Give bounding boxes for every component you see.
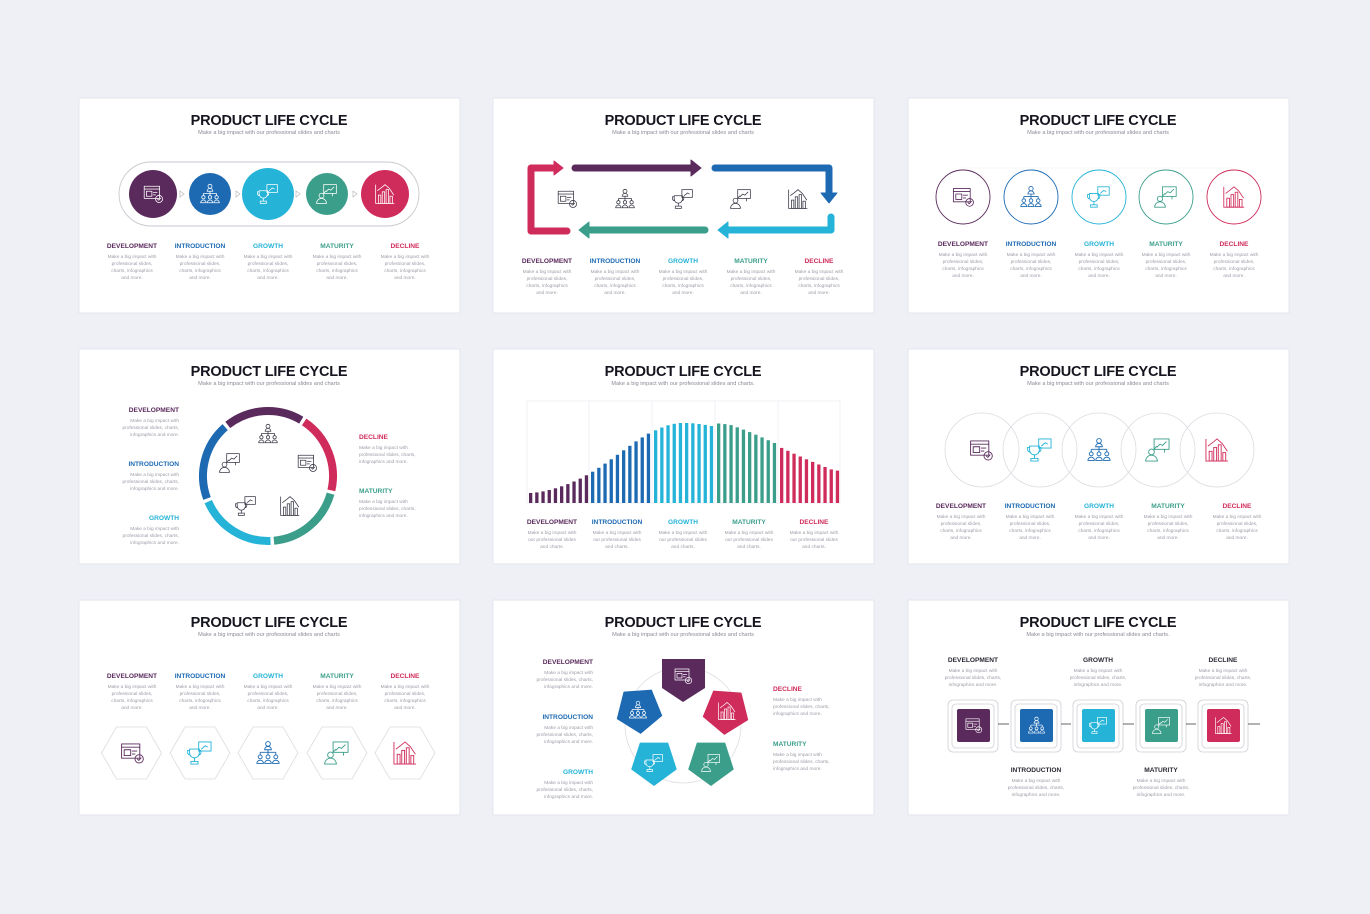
labels: Make a big impact with — [939, 252, 988, 258]
labels: and more. — [394, 705, 416, 711]
labels: and more. — [740, 290, 762, 296]
top labels: Make a big impact with — [1199, 668, 1248, 674]
labels: Make a big impact with — [313, 684, 362, 690]
labels: charts, infographics — [316, 698, 358, 704]
labels: and charts. — [802, 544, 826, 550]
labels: and more. — [189, 275, 211, 281]
labels: DEVELOPMENT — [936, 503, 986, 510]
labels: charts, infographics — [1145, 266, 1187, 272]
labels: professional slides, — [663, 276, 703, 282]
labels: charts, infographics — [526, 283, 568, 289]
labels: Make a big impact with — [937, 514, 986, 520]
left labels: professional slides, charts, — [122, 425, 179, 431]
left labels: Make a big impact with — [130, 472, 179, 478]
labels: professional slides, — [317, 261, 357, 267]
labels: professional slides, — [112, 691, 152, 697]
labels: MATURITY — [320, 243, 354, 250]
left labels: GROWTH — [563, 769, 593, 776]
labels: charts, infographics — [111, 698, 153, 704]
left labels: DEVELOPMENT — [129, 407, 179, 414]
labels: GROWTH — [253, 243, 283, 250]
labels: and charts. — [605, 544, 629, 550]
pentagons — [615, 659, 750, 791]
labels: and more. — [326, 705, 348, 711]
slide 1: circles in pill — [79, 98, 460, 313]
labels — [522, 258, 844, 296]
labels: DEVELOPMENT — [938, 241, 988, 248]
title: PRODUCT LIFE CYCLE — [605, 113, 762, 129]
left labels — [536, 659, 593, 800]
subtitle: Make a big impact with our professional slides and charts — [1027, 381, 1169, 387]
labels: INTRODUCTION — [590, 258, 641, 265]
left labels: Make a big impact with — [544, 670, 593, 676]
title: PRODUCT LIFE CYCLE — [1020, 615, 1177, 631]
left labels: infographics and more. — [130, 540, 179, 546]
labels: DECLINE — [800, 519, 829, 526]
labels: our professional slides — [593, 537, 641, 543]
left labels: DEVELOPMENT — [543, 659, 593, 666]
labels: DEVELOPMENT — [107, 673, 157, 680]
labels: Make a big impact with — [523, 269, 572, 275]
pill outline — [119, 162, 419, 226]
right labels — [773, 686, 830, 772]
bottom labels: professional slides, charts, — [1133, 785, 1189, 791]
bottom labels: infographics and more. — [1137, 792, 1185, 798]
labels: Make a big impact with — [176, 254, 225, 260]
labels: MATURITY — [734, 258, 768, 265]
labels: charts, infographics — [111, 268, 153, 274]
labels: professional slides, — [1217, 521, 1257, 527]
labels: Make a big impact with — [1144, 514, 1193, 520]
labels: and more. — [1223, 273, 1245, 279]
labels: professional slides, — [1214, 259, 1254, 265]
left labels: professional slides, charts, — [122, 533, 179, 539]
labels: professional slides, — [527, 276, 567, 282]
labels: GROWTH — [253, 673, 283, 680]
right labels: DECLINE — [359, 434, 389, 441]
right labels: infographics and more. — [359, 513, 408, 519]
labels: and more. — [257, 275, 279, 281]
left labels: Make a big impact with — [544, 780, 593, 786]
subtitle: Make a big impact with our professional slides and charts — [198, 130, 340, 136]
labels: charts, infographics — [1078, 528, 1120, 534]
labels: MATURITY — [1151, 503, 1185, 510]
right labels: Make a big impact with — [773, 697, 822, 703]
left labels: Make a big impact with — [544, 725, 593, 731]
labels: DECLINE — [805, 258, 834, 265]
labels: and charts. — [671, 544, 695, 550]
left labels — [122, 407, 179, 546]
labels: our professional slides — [528, 537, 576, 543]
labels: Make a big impact with — [727, 269, 776, 275]
subtitle: Make a big impact with our professional slides and charts — [612, 632, 754, 638]
left labels: GROWTH — [149, 515, 179, 522]
labels: and more. — [1088, 273, 1110, 279]
right labels: MATURITY — [773, 741, 807, 748]
slide 3: outline circles — [908, 98, 1289, 313]
labels: Make a big impact with — [659, 269, 708, 275]
labels: INTRODUCTION — [592, 519, 643, 526]
right labels: Make a big impact with — [773, 752, 822, 758]
title: PRODUCT LIFE CYCLE — [1020, 113, 1177, 129]
labels: professional slides, — [248, 261, 288, 267]
labels: Make a big impact with — [593, 530, 642, 536]
right labels — [359, 434, 416, 519]
hexagons — [102, 727, 435, 779]
top labels: DECLINE — [1209, 657, 1238, 664]
labels: charts, infographics — [247, 268, 289, 274]
left labels: infographics and more. — [544, 684, 593, 690]
labels: DECLINE — [1220, 241, 1249, 248]
title: PRODUCT LIFE CYCLE — [1020, 364, 1177, 380]
labels: Make a big impact with — [1006, 514, 1055, 520]
subtitle: Make a big impact with our professional slides and charts. — [611, 381, 755, 387]
labels: our professional slides — [790, 537, 838, 543]
top labels: Make a big impact with — [949, 668, 998, 674]
labels: Make a big impact with — [313, 254, 362, 260]
labels: and more. — [808, 290, 830, 296]
labels: DECLINE — [391, 673, 420, 680]
title: PRODUCT LIFE CYCLE — [605, 615, 762, 631]
labels: Make a big impact with — [528, 530, 577, 536]
labels: and more. — [326, 275, 348, 281]
labels: Make a big impact with — [1142, 252, 1191, 258]
labels: charts, infographics — [179, 698, 221, 704]
labels: MATURITY — [732, 519, 766, 526]
labels: Make a big impact with — [244, 684, 293, 690]
labels: INTRODUCTION — [175, 673, 226, 680]
labels: Make a big impact with — [244, 254, 293, 260]
labels: professional slides, — [941, 521, 981, 527]
labels: and charts. — [540, 544, 564, 550]
labels: and more. — [1155, 273, 1177, 279]
labels: charts, infographics — [1147, 528, 1189, 534]
labels: GROWTH — [668, 519, 698, 526]
labels: Make a big impact with — [108, 684, 157, 690]
slide 9: square chain — [908, 600, 1289, 815]
labels: professional slides, — [731, 276, 771, 282]
labels: professional slides, — [385, 691, 425, 697]
top labels — [945, 657, 1251, 688]
labels: charts, infographics — [594, 283, 636, 289]
left labels: professional slides, charts, — [122, 479, 179, 485]
labels: Make a big impact with — [795, 269, 844, 275]
left labels: professional slides, charts, — [536, 787, 593, 793]
top labels: professional slides, charts, — [1195, 675, 1251, 681]
labels: Make a big impact with — [1210, 252, 1259, 258]
labels: INTRODUCTION — [1006, 241, 1057, 248]
labels: professional slides, — [799, 276, 839, 282]
labels: GROWTH — [668, 258, 698, 265]
labels: INTRODUCTION — [175, 243, 226, 250]
subtitle: Make a big impact with our professional slides and charts. — [1026, 632, 1170, 638]
bottom labels: Make a big impact with — [1012, 778, 1061, 784]
top labels: GROWTH — [1083, 657, 1113, 664]
labels: DECLINE — [1223, 503, 1252, 510]
labels: INTRODUCTION — [1005, 503, 1056, 510]
title: PRODUCT LIFE CYCLE — [191, 615, 348, 631]
labels: charts, infographics — [316, 268, 358, 274]
right labels: infographics and more. — [773, 766, 822, 772]
right labels: DECLINE — [773, 686, 803, 693]
labels: and more. — [952, 273, 974, 279]
left labels: infographics and more. — [544, 794, 593, 800]
slide 2: arrow loop — [493, 98, 874, 313]
subtitle: Make a big impact with our professional slides and charts — [1027, 130, 1169, 136]
labels: professional slides, — [1146, 259, 1186, 265]
top labels: DEVELOPMENT — [948, 657, 998, 664]
right labels: MATURITY — [359, 488, 393, 495]
labels: charts, infographics — [1010, 266, 1052, 272]
right labels: Make a big impact with — [359, 445, 408, 451]
labels: charts, infographics — [1216, 528, 1258, 534]
bottom labels: Make a big impact with — [1137, 778, 1186, 784]
right labels: professional slides, charts, — [359, 506, 416, 512]
labels: DEVELOPMENT — [527, 519, 577, 526]
top labels: infographics and more. — [1074, 682, 1122, 688]
labels: charts, infographics — [1009, 528, 1051, 534]
labels: DEVELOPMENT — [522, 258, 572, 265]
labels: charts, infographics — [384, 268, 426, 274]
right labels: professional slides, charts, — [359, 452, 416, 458]
right labels: infographics and more. — [359, 459, 408, 465]
labels: Make a big impact with — [790, 530, 839, 536]
labels: and more. — [536, 290, 558, 296]
icons — [558, 189, 807, 208]
labels: Make a big impact with — [659, 530, 708, 536]
right labels: Make a big impact with — [359, 499, 408, 505]
labels: professional slides, — [1148, 521, 1188, 527]
labels: charts, infographics — [1078, 266, 1120, 272]
right labels: infographics and more. — [773, 711, 822, 717]
labels: charts, infographics — [940, 528, 982, 534]
left labels: infographics and more. — [544, 739, 593, 745]
labels — [938, 241, 1259, 279]
title: PRODUCT LIFE CYCLE — [605, 364, 762, 380]
labels — [107, 243, 430, 281]
labels: professional slides, — [248, 691, 288, 697]
top labels: infographics and more. — [949, 682, 997, 688]
arrows — [531, 160, 837, 238]
bottom labels: INTRODUCTION — [1011, 767, 1062, 774]
labels: charts, infographics — [662, 283, 704, 289]
labels: DECLINE — [391, 243, 420, 250]
labels: professional slides, — [385, 261, 425, 267]
labels: charts, infographics — [942, 266, 984, 272]
top labels: professional slides, charts, — [945, 675, 1001, 681]
circles — [945, 413, 1254, 487]
subtitle: Make a big impact with our professional slides and charts — [612, 130, 754, 136]
left labels: INTRODUCTION — [128, 461, 179, 468]
labels: our professional slides — [659, 537, 707, 543]
labels: GROWTH — [1084, 503, 1114, 510]
ring — [177, 385, 359, 567]
left labels: INTRODUCTION — [542, 714, 593, 721]
bottom labels: professional slides, charts, — [1008, 785, 1064, 791]
subtitle: Make a big impact with our professional slides and charts — [198, 632, 340, 638]
labels: charts, infographics — [1213, 266, 1255, 272]
title: PRODUCT LIFE CYCLE — [191, 113, 348, 129]
left labels: Make a big impact with — [130, 418, 179, 424]
labels: Make a big impact with — [1075, 252, 1124, 258]
labels: and more. — [604, 290, 626, 296]
left labels: professional slides, charts, — [536, 732, 593, 738]
labels: and more. — [1019, 535, 1041, 541]
bottom labels: MATURITY — [1144, 767, 1178, 774]
labels: charts, infographics — [384, 698, 426, 704]
labels: and more. — [1157, 535, 1179, 541]
slide 6: overlapping circles — [908, 349, 1289, 564]
circles — [936, 168, 1261, 224]
boxes — [948, 700, 1260, 752]
labels: MATURITY — [1149, 241, 1183, 248]
labels: professional slides, — [1010, 521, 1050, 527]
labels: professional slides, — [595, 276, 635, 282]
labels: Make a big impact with — [591, 269, 640, 275]
labels: and more. — [257, 705, 279, 711]
labels — [527, 519, 839, 550]
labels: Make a big impact with — [108, 254, 157, 260]
labels: professional slides, — [317, 691, 357, 697]
right labels: professional slides, charts, — [773, 704, 830, 710]
labels: DEVELOPMENT — [107, 243, 157, 250]
labels: and more. — [950, 535, 972, 541]
labels: professional slides, — [943, 259, 983, 265]
labels: charts, infographics — [730, 283, 772, 289]
labels: Make a big impact with — [1075, 514, 1124, 520]
labels: and more. — [1020, 273, 1042, 279]
left labels: infographics and more. — [130, 432, 179, 438]
labels: MATURITY — [320, 673, 354, 680]
labels — [107, 673, 430, 711]
labels: and charts. — [737, 544, 761, 550]
circles — [129, 168, 409, 220]
labels: GROWTH — [1084, 241, 1114, 248]
bottom labels — [1008, 767, 1189, 798]
right labels: professional slides, charts, — [773, 759, 830, 765]
labels: professional slides, — [1011, 259, 1051, 265]
labels: professional slides, — [1079, 521, 1119, 527]
labels: and more. — [121, 705, 143, 711]
labels: and more. — [189, 705, 211, 711]
labels: professional slides, — [112, 261, 152, 267]
labels: professional slides, — [1079, 259, 1119, 265]
top labels: Make a big impact with — [1074, 668, 1123, 674]
top labels: infographics and more. — [1199, 682, 1247, 688]
chart — [527, 401, 840, 503]
labels: Make a big impact with — [381, 684, 430, 690]
labels: professional slides, — [180, 691, 220, 697]
labels: and more. — [1226, 535, 1248, 541]
labels: Make a big impact with — [381, 254, 430, 260]
labels: professional slides, — [180, 261, 220, 267]
left labels: professional slides, charts, — [536, 677, 593, 683]
labels: Make a big impact with — [725, 530, 774, 536]
labels: charts, infographics — [247, 698, 289, 704]
labels: and more. — [121, 275, 143, 281]
labels: and more. — [394, 275, 416, 281]
slide 4: ring cycle — [79, 349, 460, 567]
labels: Make a big impact with — [176, 684, 225, 690]
labels: and more. — [1088, 535, 1110, 541]
slide 8: pentagons — [493, 600, 874, 815]
slide 5: bar chart — [493, 349, 874, 564]
labels: charts, infographics — [179, 268, 221, 274]
subtitle: Make a big impact with our professional slides and charts — [198, 381, 340, 387]
labels: Make a big impact with — [1007, 252, 1056, 258]
left labels: infographics and more. — [130, 486, 179, 492]
slide 7: hexagons — [79, 600, 460, 815]
labels: charts, infographics — [798, 283, 840, 289]
bottom labels: infographics and more. — [1012, 792, 1060, 798]
labels — [936, 503, 1262, 541]
labels: our professional slides — [725, 537, 773, 543]
left labels: Make a big impact with — [130, 526, 179, 532]
labels: and more. — [672, 290, 694, 296]
labels: Make a big impact with — [1213, 514, 1262, 520]
title: PRODUCT LIFE CYCLE — [191, 364, 348, 380]
top labels: professional slides, charts, — [1070, 675, 1126, 681]
